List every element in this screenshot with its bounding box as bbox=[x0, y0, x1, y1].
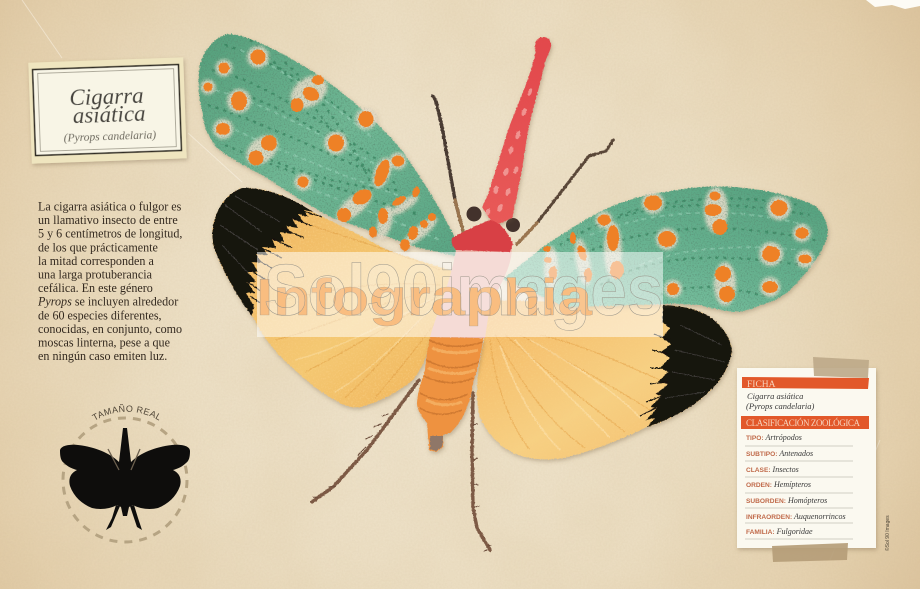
header: ficha: FICHA bbox=[747, 380, 776, 390]
wing stipple bbox=[560, 198, 815, 297]
intro text block: moscas linterna, pese a que bbox=[38, 336, 170, 350]
intro text block: la mitad corresponden a bbox=[38, 254, 154, 268]
antennae bbox=[433, 96, 613, 244]
watermark: Infographia: Infographia bbox=[256, 269, 593, 327]
wing veins bbox=[490, 335, 660, 450]
classification rows: FAMILIA: Fulgoridae bbox=[746, 527, 813, 536]
orange spots bbox=[543, 192, 812, 302]
classification rows: SUBORDEN: Homópteros bbox=[746, 496, 827, 505]
orange spots bbox=[204, 50, 436, 251]
header: clasificación zoológica: CLASIFICACIÓN ZOOLÓGICA bbox=[746, 418, 860, 428]
intro text block: se incluyen alrededor bbox=[75, 295, 178, 309]
intro text block: un llamativo insecto de entre bbox=[38, 213, 178, 227]
intro text block: una larga protuberancia bbox=[38, 268, 153, 282]
scientific name: (Pyrops candelaria) bbox=[64, 129, 157, 145]
intro text block: de 60 especies diferentes, bbox=[38, 308, 162, 322]
species name: (Pyrops candelaria) bbox=[746, 401, 815, 411]
intro text block: conocidas, en conjunto, como bbox=[38, 322, 182, 336]
insect illustration bbox=[199, 34, 828, 551]
classification rows: SUBTIPO: Antenados bbox=[746, 449, 813, 458]
data card bbox=[737, 357, 876, 562]
black wing tip bbox=[640, 305, 732, 427]
classification rows: TIPO: Artrópodos bbox=[746, 433, 802, 442]
tape: top bbox=[813, 357, 869, 378]
title: Cigarra bbox=[69, 83, 144, 110]
black wing tip bbox=[212, 188, 322, 316]
header: clasificación zoológica bbox=[741, 416, 869, 429]
abdomen bbox=[417, 337, 483, 452]
upper left wing: green bbox=[199, 34, 456, 256]
upper body between wings bbox=[430, 246, 512, 338]
intro text block: en ningún caso emiten luz. bbox=[38, 349, 167, 363]
label: tamaño real: TAMAÑO REAL bbox=[92, 404, 160, 420]
wing veins bbox=[262, 222, 445, 398]
intro text block: Pyrops bbox=[37, 295, 72, 309]
classification rows: ORDEN: Hemípteros bbox=[746, 480, 811, 489]
hind right wing: orange with black tip bbox=[477, 300, 732, 459]
spot halos bbox=[544, 187, 814, 306]
classification rows bbox=[745, 433, 853, 539]
actual size diagram bbox=[60, 404, 190, 544]
watermark: Sol90images: Sol90images bbox=[264, 251, 663, 331]
spot halos bbox=[200, 46, 441, 251]
title: asiática bbox=[72, 101, 146, 128]
intro text block: de los que prácticamente bbox=[38, 240, 158, 254]
dashed circle bbox=[63, 418, 187, 542]
horn: red cephalic protuberance bbox=[482, 37, 551, 226]
watermark bbox=[256, 251, 663, 337]
classification rows: INFRAORDEN: Auquenorrincos bbox=[746, 512, 846, 521]
eyes bbox=[466, 206, 520, 232]
thorax bbox=[452, 220, 513, 252]
intro text block: cefálica. En este género bbox=[38, 281, 153, 295]
hind left wing: orange with black tip bbox=[212, 188, 455, 407]
header: ficha bbox=[742, 377, 869, 390]
title card bbox=[28, 57, 187, 164]
wing stipple bbox=[208, 40, 420, 215]
intro text block: 5 y 6 centímetros de longitud, bbox=[38, 227, 182, 241]
legs bbox=[312, 380, 491, 551]
classification rows: CLASE: Insectos bbox=[746, 465, 799, 474]
image credit: ©Sol 90 Images bbox=[884, 515, 891, 551]
silhouette bbox=[60, 428, 190, 530]
intro text block: La cigarra asiática o fulgor es bbox=[38, 200, 182, 214]
tape: bottom bbox=[772, 543, 848, 562]
upper right wing: green bbox=[503, 187, 828, 312]
species name: Cigarra asiática bbox=[747, 391, 803, 401]
